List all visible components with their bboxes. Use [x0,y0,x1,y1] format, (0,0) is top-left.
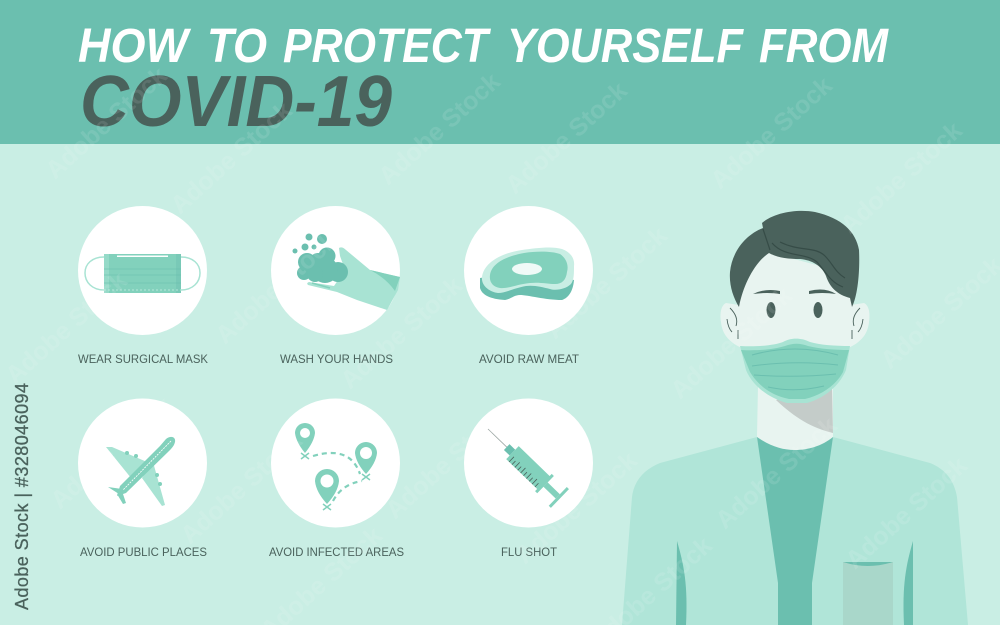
label: flu shot: FLU SHOT [501,545,558,559]
label: wash your hands: WASH YOUR HANDS [280,352,393,366]
watermark text: Adobe Stock [0,266,133,389]
label: avoid infected areas: AVOID INFECTED AREAS [269,545,404,559]
panel: wash your hands [271,206,400,335]
panel: avoid infected areas [271,398,400,528]
icon: location pins and route [295,423,377,510]
watermark text: Adobe Stock [175,426,308,549]
title line 2: COVID-19 [80,62,392,142]
panel: flu shot [464,398,593,528]
watermark text: Adobe Stock [165,96,298,219]
watermark text: Adobe Stock [840,451,973,574]
icon: syringe [479,420,569,508]
neck shadow [776,385,833,433]
watermark text: Adobe Stock [373,67,506,190]
right ear [848,303,869,348]
title line 1: YOURSELF [507,20,745,73]
face mask [740,339,850,403]
watermark text: Adobe Stock [705,71,838,194]
title line 1: PROTECT [283,20,491,73]
title line 1 [78,20,889,73]
label: wear surgical mask: WEAR SURGICAL MASK [78,352,208,366]
header band [0,0,1000,144]
icon: soapy hand [292,234,400,310]
title line 1: HOW [78,20,191,73]
face [738,252,852,350]
icon: surgical mask [85,254,200,293]
right arm fold [903,541,913,625]
watermark text: Adobe Stock [710,411,843,534]
pocket [843,562,893,625]
shirt [757,437,833,625]
watermark text: Adobe Stock [210,226,343,349]
title line 1: FROM [759,20,889,73]
watermark text: Adobe Stock [45,391,178,514]
watermark text: Adobe Stock [380,401,513,524]
panel: wear surgical mask [78,206,207,335]
watermark text: Adobe Stock [40,61,173,184]
panel: avoid raw meat [464,206,593,335]
icon: raw meat [480,247,574,300]
eyebrows [753,290,836,294]
watermark text: Adobe Stock [665,281,798,404]
left ear [721,303,742,348]
left arm fold [676,541,687,625]
hair [730,211,859,307]
watermark text: Adobe Stock [335,271,468,394]
label: avoid public places: AVOID PUBLIC PLACES [80,545,207,559]
watermark text: Adobe Stock [540,221,673,344]
icon: airplane [106,437,175,506]
label: avoid raw meat: AVOID RAW MEAT [479,352,580,366]
watermark text: Adobe Stock [510,446,643,569]
eyes [766,302,822,318]
title line 1: TO [207,20,267,73]
stock id vertical text: Adobe Stock | #328046094 [12,383,32,610]
jacket [622,437,968,625]
watermark text: Adobe Stock [835,116,968,239]
neck [757,385,833,450]
illustration: man in surgical mask [622,211,968,625]
watermark text: Adobe Stock [500,76,633,199]
panel: avoid public places [78,398,207,528]
